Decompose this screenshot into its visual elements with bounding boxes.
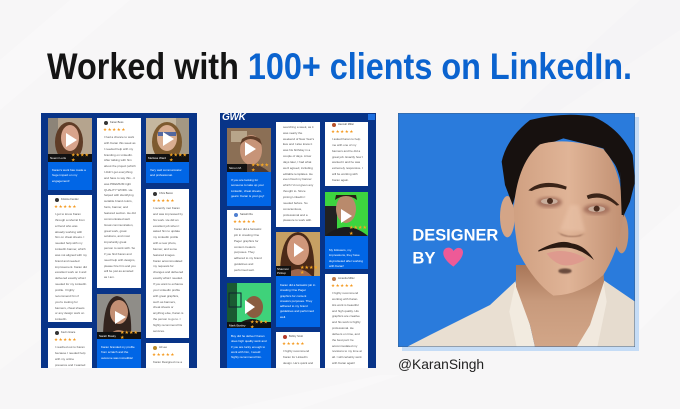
- text: designer by: [412, 226, 498, 267]
- jacket and shirt: [407, 280, 635, 347]
- quote card blue 1: Karan's work has made a huge impact on my engagement!: [52, 168, 86, 183]
- review card: Bobby: Bobby Scott: [289, 335, 303, 338]
- video testimonial 4: Simon M.: [229, 166, 242, 170]
- review card: Chris: ★★★★★: [152, 198, 175, 203]
- quote card blue 4: [227, 172, 271, 206]
- review card: long continuation: since then might make searching a week, as it was nearly the weekend of New Year's Eve and I also knew it was his birthday in a couple of days. A few days later, I had what we'd agreed, including editable templates. He even fixed my banner which I'd not given any thought to. Since joining Linkedin I needed before. So conscientious, professional and a pleasure to work with.: [283, 122, 314, 222]
- facial features: [528, 149, 623, 274]
- review card: long: ★★★★★: [103, 127, 126, 132]
- review card: Kevin: I reached out to Karan because I needed help with my online presence and I wanted: [55, 345, 85, 367]
- quote card blue 5: [227, 328, 271, 368]
- review card: Kevin: ★★★★★: [54, 337, 77, 342]
- video testimonial 6: Pickup: [277, 271, 286, 275]
- review card: long continuation: [276, 122, 320, 227]
- text: designer by: BY: [412, 248, 435, 267]
- review card: Chris: Chris Bacco: [159, 192, 173, 195]
- review card: long: [97, 118, 141, 288]
- review card: Amanda: I highly recommend working with Karan. His work is beautiful and high quality. His graphics are creative and his work is highly professional. He delivers on time, and the best part: he accommodated my revisions to my time at all. I will certainly work with Karan again!: [332, 291, 362, 365]
- quote card blue 6: Karan did a fantastic job in creating One Pager graphics for content creators purposes. They adhered to my brand guidelines and performed well.: [280, 283, 315, 319]
- neck: [516, 265, 604, 347]
- video testimonial 1: Noemi Loris: [50, 156, 67, 160]
- review card: Satoshi: ★★★★★: [233, 219, 256, 224]
- video testimonial 5: ★★★★: [250, 320, 268, 326]
- portrait card shadow: [402, 117, 639, 351]
- review card: long: I had a chance to work with Karan this week as I needed help with my branding on LinkedIn. After talking with him about the project (which I didn't get everything and have to say this - it was PREMIUM right QUALITY WORK. He helped with identifying suitable brand colors, fonts, banner, and featured section. He did communicated well. Great communication, great work, great solutions, and most importantly great person to work with. So if you find Karan and need help with designs, please hire him and you will be just as amazed as I am.: [104, 135, 136, 279]
- review card: Kristine: Kristine Fender: [61, 198, 79, 201]
- caption: handle: @KaranSingh: [398, 357, 484, 372]
- quote card blue 6: [276, 276, 320, 327]
- video testimonial 5: Mark Bosley: [229, 324, 246, 328]
- icon: heart: [443, 248, 463, 267]
- review card: Bobby: ★★★★★: [282, 341, 305, 346]
- video testimonial 2: ★★★★: [120, 330, 138, 336]
- review card: short: I asked Karan to help me with one of my banners and he did a great job. Exactly how I wanted it and he was extremely responsive. I will be working with Karan again.: [332, 137, 363, 182]
- video testimonial 1: [48, 118, 92, 162]
- ears: [500, 196, 628, 253]
- review card: Kevin: Kevin Grace: [61, 331, 75, 334]
- review card: Kevin: [48, 328, 92, 368]
- hair: [502, 115, 635, 220]
- video testimonial 3: [146, 118, 189, 162]
- review card: Amanda: [325, 274, 368, 368]
- quote card blue 3: Very well communicator and professional.: [150, 168, 182, 177]
- video testimonial 6: [276, 232, 320, 276]
- review card: Kristine: ★★★★★: [54, 204, 77, 209]
- corner button: [368, 114, 375, 120]
- quote card blue 3: [146, 162, 189, 183]
- panel: testimonials right: [220, 113, 376, 368]
- video testimonial 3: Melissa Ward: [148, 156, 166, 160]
- video testimonial 4: [227, 128, 271, 172]
- review card: Chris: I recently met Karan and was impressed by his work. He did an excellent job when I asked him to update my LinkedIn profile with a new photo, banner, and some featured images. Karan accommodated my requests for changes and delivered exactly what I needed. If you want to enhance your LinkedIn profile with great graphics, such as banners, cheat sheets or anything else, Karan is the person to go to. I highly recommend his services.: [153, 206, 183, 333]
- quote card blue 7: My followers, my impressions, they have skyrocketed after working with Karan!: [329, 248, 363, 268]
- review card: Ali: [146, 343, 189, 368]
- video testimonial 6: ★★★★: [300, 265, 318, 271]
- review card: long: Karan Bess: [110, 121, 123, 124]
- video testimonial 7: ★★★★: [349, 225, 367, 231]
- review card: Satoshi: [227, 210, 271, 277]
- video testimonial 2: Sarah Bosky: [99, 334, 117, 338]
- review card: Ali: Karan Designed me a: [153, 360, 182, 364]
- review card: Kristine: [48, 195, 92, 322]
- quote card blue 4: If you are looking for someone to take up your Linkedin, cheat sheets, gears: Karan is your guy!: [231, 178, 264, 198]
- video testimonial 6: ★: [300, 270, 305, 276]
- panel: testimonials left: [41, 113, 197, 368]
- review card: Amanda: Amanda Miller: [338, 277, 355, 280]
- video testimonial 6: Shannon: [277, 267, 289, 271]
- quote card blue 1: [48, 162, 92, 190]
- review card: Satoshi: Satoshi Ra: [240, 213, 253, 216]
- title: Worked with 100+ clients on LinkedIn.: [47, 46, 632, 87]
- video testimonial 3: ★★★★: [169, 152, 187, 158]
- quote card blue 5: Boy did he deliver! Karan does high quality work and if you are lucky enough to work with him, I would highly recommend him.: [231, 334, 267, 359]
- review card: Ali: Ali Lee: [159, 346, 167, 349]
- quote card blue 2: [97, 339, 141, 368]
- text: designer by: DESIGNER: [412, 226, 498, 245]
- review card: short: Hannah Miller: [338, 123, 354, 126]
- review card: Chris: [146, 189, 189, 338]
- portrait: designer on blue background: [398, 113, 635, 347]
- review card: Satoshi: Karan did a fantastic job in creating One Pager graphics for content creators purposes. They adhered to my brand guidelines and performed well.: [234, 227, 262, 272]
- review card: Amanda: ★★★★★: [331, 283, 354, 288]
- review card: Kristine: I got to know Karan through a referral from a friend who was already working with him on cheat sheets. I needed help with my LinkedIn banner, which was not aligned with my brand and needed improvement. Karan did excellent work on it and delivered exactly what I needed for my LinkedIn profile. I highly recommend him if you're looking for banners, cheat sheets or any design work on LinkedIn.: [55, 212, 87, 321]
- video testimonial 5: [227, 283, 271, 328]
- review card: Ali: ★★★★★: [152, 352, 175, 357]
- quote card blue 7: [325, 236, 368, 269]
- video testimonial 7: [325, 192, 368, 236]
- review card: short: [325, 122, 368, 186]
- video testimonial 1: ★★★★: [71, 152, 89, 158]
- face: [514, 141, 623, 296]
- review card: Bobby: [276, 332, 320, 368]
- video testimonial 2: [97, 294, 141, 339]
- quote card blue 2: Karan branded my profile from scratch and the outcome was incredible!: [101, 345, 135, 360]
- review card: short: ★★★★★: [331, 129, 354, 134]
- video testimonial 4: ★★★★: [251, 162, 269, 168]
